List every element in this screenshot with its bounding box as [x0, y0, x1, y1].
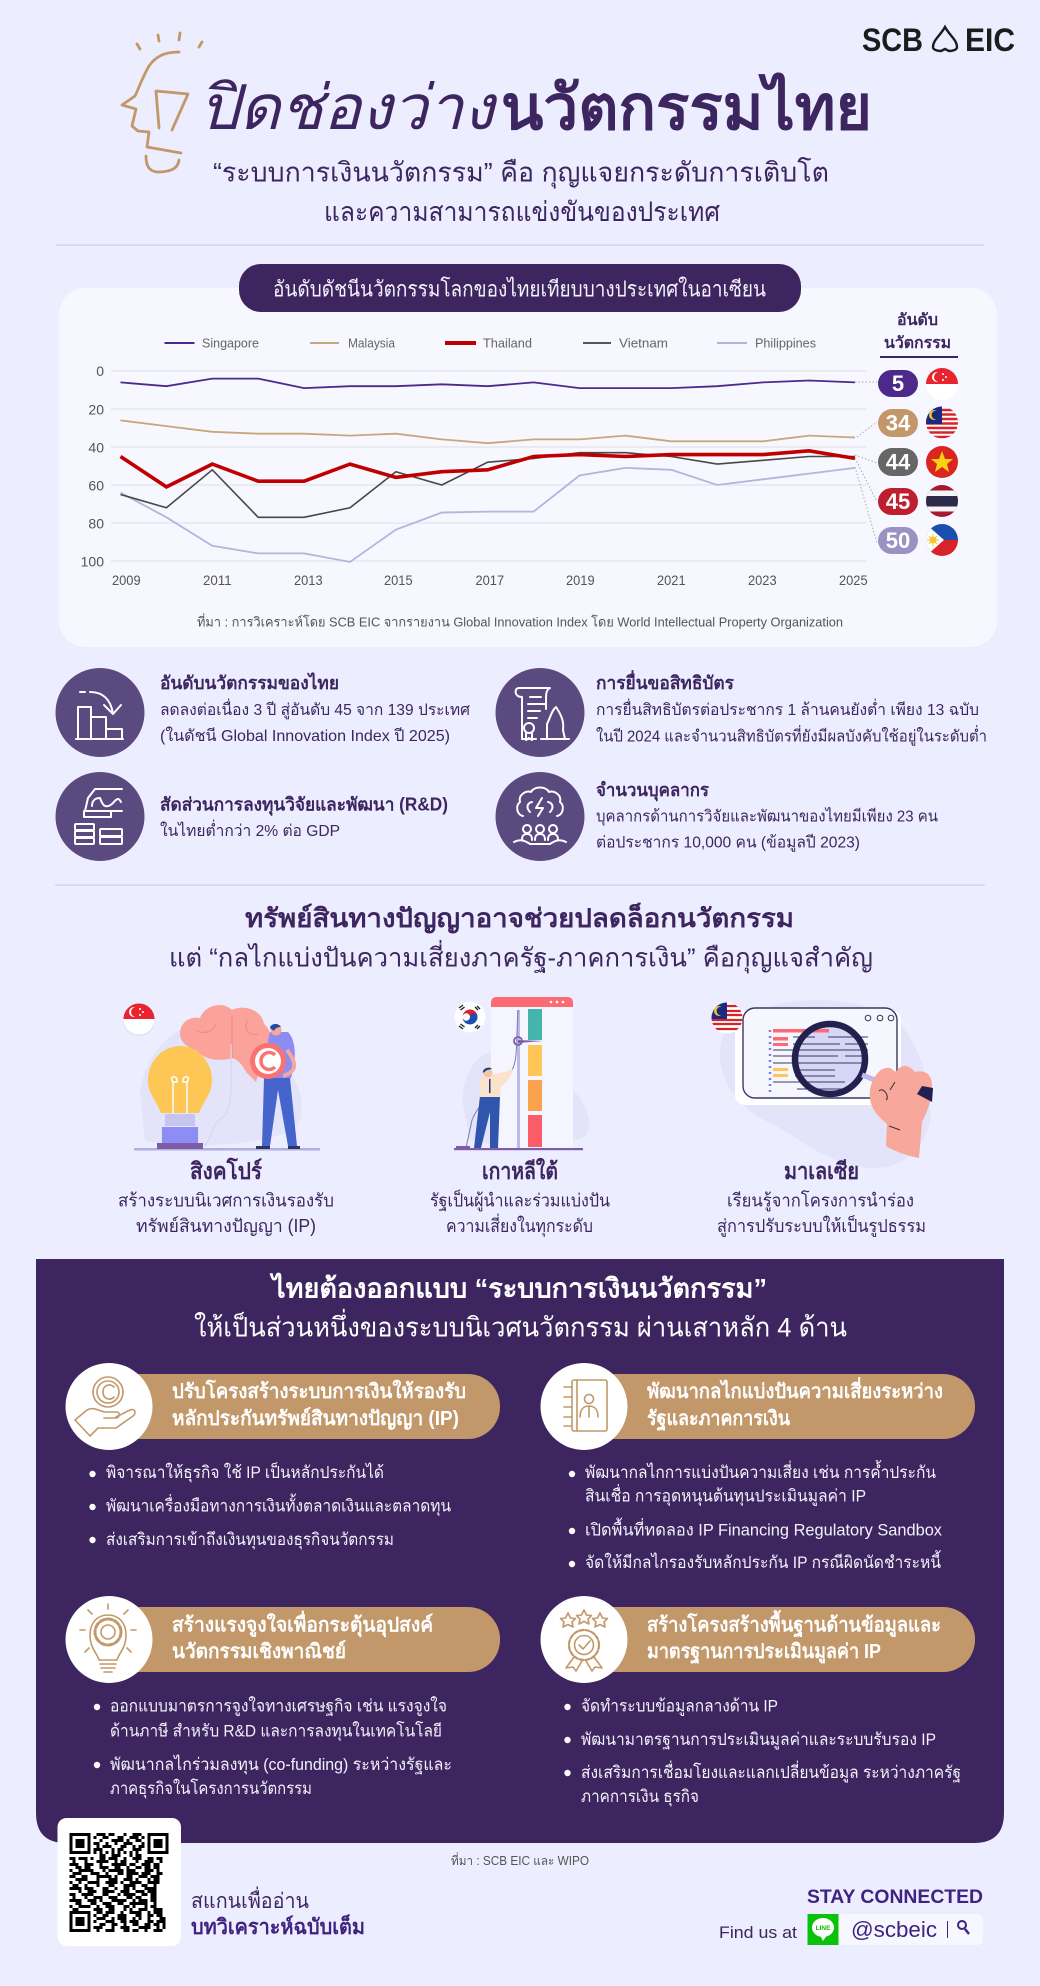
social contact block: Find us at — [719, 1923, 797, 1942]
caption: Malaysia — [717, 1158, 926, 1237]
pillar 2: เปิดพื้นที่ทดลอง IP Financing Regulatory Sandbox — [585, 1518, 942, 1540]
pillar 3: สร้างแรงจูงใจเพื่อกระตุ้นอุปสงค์ — [172, 1610, 433, 1638]
pillar 4: จัดทำระบบข้อมูลกลางด้าน IP — [581, 1696, 778, 1716]
chart heading pill — [239, 264, 801, 312]
pillar 1 — [66, 1363, 500, 1550]
icon: LINE — [808, 1914, 838, 1945]
chart legend: Singapore — [202, 336, 259, 350]
fact: personnel: ต่อประชากร 10,000 คน (ข้อมูลปี 2023) — [596, 834, 860, 852]
person with copyright badge — [262, 1078, 297, 1146]
line chart: 20 — [88, 402, 104, 418]
pillar 3: พัฒนากลไกร่วมลงทุน (co-funding) ระหว่างรัฐและ — [110, 1754, 452, 1775]
illustration: South Korea — [454, 997, 589, 1150]
pillar 4: พัฒนามาตรฐานการประเมินมูลค่าและระบบรับรอง IP — [581, 1730, 936, 1750]
scan caption: บทวิเคราะห์ฉบับเต็ม — [191, 1913, 365, 1939]
title — [199, 72, 872, 143]
chart legend: Vietnam — [619, 336, 668, 350]
rank badge: Singapore 5 — [878, 368, 958, 400]
chart legend: Philippines — [755, 336, 816, 350]
pillar 2 — [540, 1363, 975, 1572]
caption: South Korea: ความเสี่ยงในทุกระดับ — [446, 1213, 593, 1237]
heading: pillars: ไทยต้องออกแบบ “ระบบการเงินนวัตกรรม” — [269, 1272, 767, 1304]
caption: Singapore: ทรัพย์สินทางปัญญา (IP) — [136, 1216, 316, 1236]
title: นวัตกรรมไทย — [501, 72, 872, 143]
line chart — [81, 363, 868, 588]
line chart: 2017 — [476, 572, 504, 588]
chart legend: Malaysia — [348, 336, 396, 350]
fact: personnel — [496, 772, 938, 861]
pillar 4: ภาคการเงิน ธุรกิจ — [581, 1787, 699, 1807]
pillar 3: ออกแบบมาตรการจูงใจทางเศรษฐกิจ เช่น แรงจูงใจ — [110, 1696, 447, 1716]
chart source: ที่มา : การวิเคราะห์โดย SCB EIC จากรายงาน Global Innovation Index โดย World Intellectual Property Organization — [197, 614, 843, 630]
icon: rosette with stars — [560, 1610, 608, 1671]
line chart: 2019 — [566, 572, 595, 588]
pillar 1: ส่งเสริมการเข้าถึงเงินทุนของธุรกิจนวัตกรรม — [106, 1530, 394, 1550]
heading: intellectual property: แต่ “กลไกแบ่งปันความเสี่ยงภาครัฐ-ภาคการเงิน” คือกุญแจสำคัญ — [169, 940, 873, 974]
rank badge: Thailand 45: 45 — [886, 489, 910, 514]
fact: personnel: บุคลากรด้านการวิจัยและพัฒนาของไทยมีเพียง 23 คน — [596, 806, 938, 826]
pillar 1: หลักประกันทรัพย์สินทางปัญญา (IP) — [172, 1407, 459, 1430]
logo: SCB EIC: EIC — [965, 22, 1015, 58]
social contact block — [719, 1887, 983, 1945]
flag: Singapore — [123, 1003, 155, 1036]
pillar 1: พัฒนาเครื่องมือทางการเงินทั้งตลาดเงินและตลาดทุน — [106, 1494, 451, 1516]
icon: head with lightbulb rays — [122, 33, 202, 172]
logo: SCB EIC — [862, 22, 1015, 58]
line chart: 80 — [88, 516, 104, 532]
icon: search — [958, 1921, 969, 1934]
icon: LINE: LINE — [816, 1925, 831, 1932]
caption: Singapore — [118, 1157, 334, 1236]
social contact block: @scbeic — [851, 1917, 937, 1942]
fact: patents — [496, 668, 987, 757]
heading: pillars: ให้เป็นส่วนหนึ่งของระบบนิเวศนวัตกรรม ผ่านเสาหลัก 4 ด้าน — [194, 1308, 847, 1342]
rank badge: Singapore 5: 5 — [892, 371, 904, 396]
person pulling rope — [474, 1096, 500, 1148]
line chart: 40 — [88, 440, 104, 456]
social contact block: STAY CONNECTED — [807, 1887, 983, 1908]
icon: hand holding copyright — [75, 1377, 135, 1436]
rank badge: Malaysia 34 — [878, 406, 958, 439]
pillar 4: สร้างโครงสร้างพื้นฐานด้านข้อมูลและ — [647, 1610, 941, 1638]
pillar 3: นวัตกรรมเชิงพาณิชย์ — [172, 1640, 346, 1663]
rank badge: Philippines 50 — [878, 524, 958, 556]
panel: chart — [59, 264, 997, 647]
rank column heading: อันดับ — [897, 311, 938, 329]
fact: patents: การยื่นสิทธิบัตรต่อประชากร 1 ล้านคนยังต่ำ เพียง 13 ฉบับ — [596, 698, 979, 719]
line chart: 2021 — [657, 572, 686, 588]
icon: notebook with person — [564, 1380, 607, 1431]
pillar 2: พัฒนากลไกแบ่งปันความเสี่ยงระหว่าง — [647, 1376, 943, 1403]
illustration: Singapore — [123, 1003, 320, 1150]
fact: innovation rank — [56, 668, 470, 757]
rank column heading: นวัตกรรม — [884, 334, 951, 352]
bulb — [148, 1046, 212, 1113]
rank badge: Vietnam 44: 44 — [886, 450, 911, 474]
icon: hand with coins — [75, 789, 122, 844]
brain — [180, 1005, 272, 1082]
caption: Malaysia: มาเลเซีย — [784, 1158, 859, 1184]
title: ปิดช่องว่าง — [199, 74, 498, 143]
icon: lightbulb with gear — [80, 1604, 136, 1672]
scan caption: สแกนเพื่ออ่าน — [191, 1886, 309, 1913]
pillar 3 — [66, 1596, 500, 1799]
illustration: Malaysia — [711, 1000, 933, 1168]
fact: patents: ในปี 2024 และจำนวนสิทธิบัตรที่ยังมีผลบังคับใช้อยู่ในระดับต่ำ — [596, 724, 987, 746]
pillar 4 — [540, 1596, 975, 1807]
fact: innovation rank: ลดลงต่อเนื่อง 3 ปี สู่อันดับ 45 จาก 139 ประเทศ — [160, 698, 470, 720]
pillar 4: มาตรฐานการประเมินมูลค่า IP — [647, 1641, 881, 1665]
flag: South Korea — [454, 1002, 486, 1032]
caption: South Korea: รัฐเป็นผู้นำและร่วมแบ่งปัน — [430, 1188, 610, 1212]
pillar 2: สินเชื่อ การอุดหนุนต้นทุนประเมินมูลค่า IP — [585, 1484, 866, 1506]
fact: patents: การยื่นขอสิทธิบัตร — [596, 670, 734, 693]
line chart: 2013 — [294, 572, 323, 588]
line chart: 2023 — [748, 572, 777, 588]
line chart: 2015 — [384, 572, 413, 588]
line chart: 2011 — [203, 572, 232, 588]
rank badge: Malaysia 34: 34 — [886, 410, 911, 436]
icon: brain and people — [514, 788, 566, 844]
pillar 1: ปรับโครงสร้างระบบการเงินให้รองรับ — [172, 1379, 466, 1403]
pillar 2: พัฒนากลไกการแบ่งปันความเสี่ยง เช่น การค้ำประกัน — [585, 1460, 936, 1482]
flag: Malaysia — [711, 1002, 743, 1034]
line chart: 100 — [81, 554, 104, 570]
source: ที่มา : SCB EIC และ WIPO — [451, 1852, 589, 1868]
icon: patent scroll — [516, 688, 569, 740]
heading: intellectual property: ทรัพย์สินทางปัญญาอาจช่วยปลดล็อกนวัตกรรม — [245, 902, 794, 934]
fact: innovation rank: (ในดัชนี Global Innovation Index ปี 2025) — [160, 726, 450, 745]
caption: Malaysia: เรียนรู้จากโครงการนำร่อง — [727, 1190, 914, 1212]
rank badge: Philippines 50: 50 — [886, 528, 910, 553]
pillar 2: จัดให้มีกลไกรองรับหลักประกัน IP กรณีผิดนัดชำระหนี้ — [585, 1550, 941, 1572]
heading: pillars — [194, 1272, 847, 1342]
subtitle — [213, 158, 829, 227]
caption: Singapore: สิงคโปร์ — [190, 1157, 263, 1184]
pillar 2: รัฐและภาคการเงิน — [647, 1408, 790, 1432]
fact: personnel: จำนวนบุคลากร — [596, 780, 709, 802]
heading: intellectual property — [169, 902, 873, 974]
icon: falling bars — [76, 692, 123, 739]
panel: four pillars — [36, 1259, 1004, 1843]
fact: R&D: ในไทยต่ำกว่า 2% ต่อ GDP — [160, 819, 340, 840]
logo: SCB EIC: SCB — [862, 22, 923, 58]
fact: R&D — [56, 772, 448, 861]
rank badge: Vietnam 44 — [878, 446, 958, 478]
chart heading pill: อันดับดัชนีนวัตกรรมโลกของไทยเทียบบางประเทศในอาเซียน — [273, 276, 766, 302]
fact: R&D: สัดส่วนการลงทุนวิจัยและพัฒนา (R&D) — [160, 794, 448, 816]
rank badge: Thailand 45 — [878, 485, 958, 517]
line chart: 60 — [88, 478, 104, 494]
pillar 3: ด้านภาษี สำหรับ R&D และการลงทุนในเทคโนโลยี — [110, 1720, 442, 1742]
caption: South Korea — [430, 1157, 610, 1237]
subtitle: และความสามารถแข่งขันของประเทศ — [324, 197, 720, 227]
chart legend: Thailand — [483, 336, 532, 350]
fact: innovation rank: อันดับนวัตกรรมของไทย — [160, 672, 339, 693]
line chart: 0 — [96, 363, 104, 379]
pillar 1: พิจารณาให้ธุรกิจ ใช้ IP เป็นหลักประกันได้ — [106, 1461, 384, 1483]
pillar 4: ส่งเสริมการเชื่อมโยงและแลกเปลี่ยนข้อมูล ระหว่างภาครัฐ — [581, 1760, 961, 1783]
line chart: 2009 — [112, 572, 141, 588]
caption: South Korea: เกาหลีใต้ — [482, 1157, 558, 1184]
line chart: 2025 — [839, 572, 868, 588]
caption: Singapore: สร้างระบบนิเวศการเงินรองรับ — [118, 1190, 334, 1210]
chart legend — [164, 336, 816, 350]
pillar 3: ภาคธุรกิจในโครงการนวัตกรรม — [110, 1778, 312, 1799]
rank column heading — [880, 311, 958, 358]
subtitle: “ระบบการเงินนวัตกรรม” คือ กุญแจยกระดับการเติบโต — [213, 158, 829, 190]
caption: Malaysia: สู่การปรับระบบให้เป็นรูปธรรม — [717, 1214, 926, 1237]
scan caption — [191, 1886, 365, 1939]
QR code — [58, 1818, 181, 1946]
